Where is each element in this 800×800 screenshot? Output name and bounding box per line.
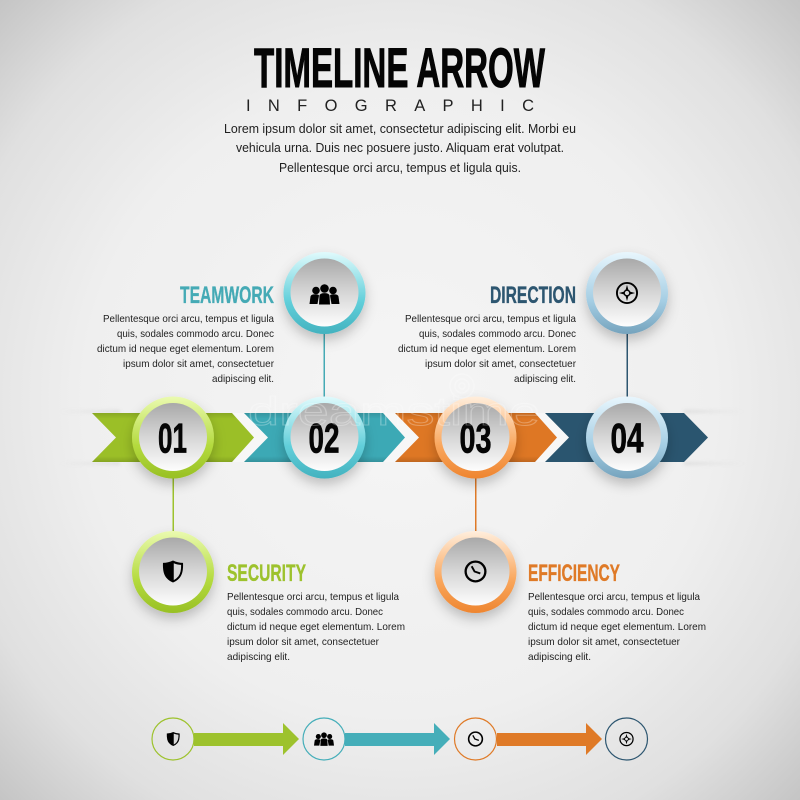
block: teamwork: TEAMWORK [180, 282, 274, 309]
small icon: shield [152, 718, 194, 760]
intro text [224, 122, 576, 175]
icon circle: teamwork [284, 252, 366, 334]
small icon: compass [606, 718, 648, 760]
block: security [227, 560, 405, 663]
block: direction: ipsum dolor sit amet, consectetuer [425, 358, 576, 370]
block: teamwork: Pellentesque orci arcu, tempus et ligula [103, 313, 274, 325]
block: security: SECURITY [227, 560, 306, 587]
bottom flow summary [152, 718, 648, 760]
subtitle: INFOGRAPHIC [246, 97, 534, 115]
watermark: dreamstime [248, 390, 540, 434]
intro text: vehicula urna. Duis nec posuere justo. Aliquam erat volutpat. [236, 141, 564, 155]
block: security: quis, sodales commodo arcu. Donec [227, 606, 383, 618]
title: TIMELINE ARROW [254, 36, 545, 99]
node 03 [434, 396, 516, 478]
block: teamwork: dictum id neque eget elementum. Lorem [97, 343, 274, 355]
block: direction: dictum id neque eget elementum. Lorem [398, 343, 576, 355]
connector: teamwork [324, 330, 325, 400]
block: efficiency: Pellentesque orci arcu, tempus et ligula [528, 591, 700, 603]
node 03: 03 [460, 414, 492, 462]
block: teamwork: ipsum dolor sit amet, consectetuer [123, 358, 274, 370]
green arrow segment [92, 413, 254, 462]
timeline band shadows [60, 410, 744, 465]
arrow: orange [497, 723, 602, 755]
icon circle: security [132, 531, 214, 613]
connector: security [172, 476, 174, 534]
dark blue arrow segment [545, 413, 708, 462]
icon circle: direction [586, 252, 668, 334]
block: efficiency: dictum id neque eget elementum. Lorem [528, 621, 706, 633]
block: efficiency [528, 560, 706, 663]
arrow: green [194, 723, 299, 755]
teal arrow segment [244, 413, 405, 462]
node 01: 01 [158, 414, 187, 462]
block: direction: adipiscing elit. [514, 373, 576, 385]
node 01 [132, 396, 214, 478]
band edge shading [92, 413, 557, 462]
orange arrow segment [395, 413, 557, 462]
block: security: adipiscing elit. [227, 651, 290, 663]
node 04 [586, 396, 668, 478]
block: efficiency: ipsum dolor sit amet, consectetuer [528, 636, 680, 648]
block: efficiency: EFFICIENCY [528, 560, 620, 587]
white chevron gaps [228, 413, 570, 462]
block: direction: quis, sodales commodo arcu. Donec [419, 328, 576, 340]
icon circle: efficiency [434, 531, 516, 613]
small icon: clock [454, 718, 496, 760]
watermark [248, 374, 540, 434]
block: security: dictum id neque eget elementum. Lorem [227, 621, 405, 633]
connector: efficiency [475, 476, 476, 534]
block: direction: Pellentesque orci arcu, tempus et ligula [405, 313, 576, 325]
timeline arrow band [92, 413, 708, 462]
block: direction: DIRECTION [490, 282, 576, 309]
node 02 [284, 396, 366, 478]
small icon: people [303, 718, 345, 760]
block: security: ipsum dolor sit amet, consectetuer [227, 636, 379, 648]
block: teamwork: adipiscing elit. [212, 373, 274, 385]
block: teamwork: quis, sodales commodo arcu. Donec [117, 328, 274, 340]
block: teamwork [97, 282, 274, 385]
block: efficiency: adipiscing elit. [528, 651, 591, 663]
node 02: 02 [308, 414, 340, 462]
node 04: 04 [610, 414, 644, 462]
block: direction [398, 282, 576, 385]
block: security: Pellentesque orci arcu, tempus et ligula [227, 591, 399, 603]
arrow: teal [345, 723, 450, 755]
block: efficiency: quis, sodales commodo arcu. Donec [528, 606, 684, 618]
intro text: Pellentesque orci arcu, tempus et ligula quis. [279, 161, 521, 175]
connector: direction [626, 330, 628, 400]
intro text: Lorem ipsum dolor sit amet, consectetur adipiscing elit. Morbi eu [224, 122, 576, 136]
